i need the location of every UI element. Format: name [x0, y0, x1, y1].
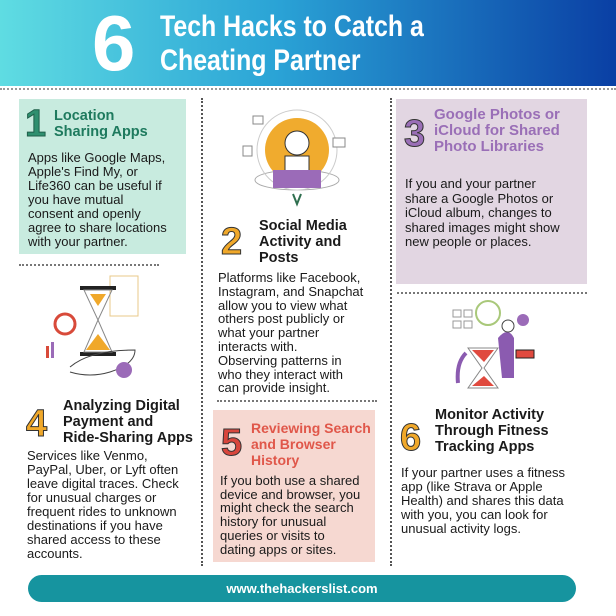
panel 3: google photos	[396, 99, 587, 284]
text 6: with you, you can look for	[401, 507, 548, 522]
text 2: Instagram, and Snapchat	[218, 284, 363, 299]
text 1: Apps like Google Maps,	[28, 150, 165, 165]
number 3: 3	[404, 113, 425, 155]
heading 2	[259, 218, 347, 266]
text 6: unusual activity logs.	[401, 521, 521, 536]
text 3: iCloud album, changes to	[405, 205, 552, 220]
title	[160, 10, 424, 77]
title: Cheating Partner	[160, 44, 361, 77]
heading 6	[435, 407, 549, 455]
heading 1: Sharing Apps	[54, 124, 148, 140]
text 2	[218, 270, 364, 395]
text 4: shared access to these	[27, 532, 161, 547]
text 3: shared images might show	[405, 220, 560, 234]
text 6: app (like Strava or Apple	[401, 479, 543, 494]
text 6: If your partner uses a fitness	[401, 465, 565, 480]
text 1: you have mutual	[28, 192, 123, 207]
text 2: allow you to view what	[218, 298, 347, 313]
number 1: 1	[25, 103, 46, 145]
text 2: who they interact with	[218, 367, 343, 382]
heading 4: Analyzing Digital	[63, 398, 180, 414]
text 5: dating apps or sites.	[220, 542, 336, 557]
text 1: agree to share locations	[28, 220, 167, 235]
text 4	[27, 448, 179, 561]
text 2: Platforms like Facebook,	[218, 270, 360, 285]
heading 4: Ride-Sharing Apps	[63, 430, 193, 446]
heading 1: Location	[54, 108, 114, 124]
heading 3: iCloud for Shared	[434, 122, 560, 139]
text 5: might check the search	[220, 500, 354, 515]
heading 3: Photo Libraries	[434, 138, 544, 155]
text 4: PayPal, Uber, or Lyft often	[27, 462, 178, 477]
text 4: for unusual charges or	[27, 490, 156, 505]
heading 6: Through Fitness	[435, 423, 549, 439]
text 5: If you both use a shared	[220, 473, 359, 488]
text 4: frequent rides to unknown	[27, 504, 177, 519]
text 4: Services like Venmo,	[27, 448, 148, 463]
heading 6: Tracking Apps	[435, 439, 534, 455]
number 2: 2	[221, 221, 242, 263]
heading 2: Activity and	[259, 234, 341, 250]
heading 2: Social Media	[259, 218, 347, 234]
header number 6: 6	[92, 0, 135, 87]
heading 5: History	[251, 452, 299, 468]
text 2: Observing patterns in	[218, 353, 342, 368]
heading 2: Posts	[259, 250, 298, 266]
text 5	[220, 473, 360, 557]
header banner	[0, 0, 616, 86]
text 4: accounts.	[27, 546, 83, 561]
text 1	[28, 150, 167, 249]
text 4: destinations if you have	[27, 518, 163, 533]
heading 1	[54, 108, 148, 140]
panel 1: location sharing	[19, 99, 186, 254]
title: Tech Hacks to Catch a	[160, 10, 424, 43]
text 2: what your partner	[218, 325, 319, 340]
number 4: 4	[26, 403, 47, 445]
text 3: share a Google Photos or	[405, 190, 553, 206]
icon: social media illustration	[242, 110, 346, 207]
heading 6: Monitor Activity	[435, 407, 544, 423]
text 3: If you and your partner	[405, 176, 536, 191]
number 6: 6	[400, 417, 421, 459]
heading 4: Payment and	[63, 414, 153, 430]
footer url pill: www.thehackerslist.com	[226, 581, 378, 596]
panel 4: digital payment	[26, 398, 193, 561]
heading 4	[63, 398, 193, 446]
heading 5: Reviewing Search	[251, 420, 371, 436]
text 2: interacts with.	[218, 339, 297, 354]
text 6: Health) and shares this data	[401, 493, 564, 508]
icon: fitness illustration	[452, 300, 534, 388]
panel 6: fitness	[400, 407, 565, 536]
text 6	[401, 465, 565, 536]
footer url pill	[28, 575, 576, 602]
text 2: others post publicly or	[218, 311, 344, 326]
icon: hourglass in hand illustration	[46, 276, 138, 378]
text 3	[405, 176, 560, 249]
text 3: new people or places.	[405, 234, 531, 249]
heading 3: Google Photos or	[434, 106, 560, 123]
text 1: with your partner.	[28, 234, 128, 249]
text 4: leave digital traces. Check	[27, 476, 179, 491]
heading 3	[434, 106, 560, 155]
panel 2: social media	[218, 218, 364, 395]
text 1: consent and openly	[28, 206, 141, 221]
heading 5: and Browser	[251, 436, 336, 452]
text 5: queries or visits to	[220, 528, 325, 543]
heading 5	[251, 420, 371, 468]
text 5: history for unusual	[220, 514, 326, 529]
text 1: Apple's Find My, or	[28, 164, 138, 179]
panel 5: search history	[213, 410, 375, 562]
text 5: device and browser, you	[220, 487, 360, 502]
text 1: Life360 can be useful if	[28, 178, 162, 193]
number 5: 5	[221, 422, 242, 464]
text 2: can provide insight.	[218, 380, 330, 395]
